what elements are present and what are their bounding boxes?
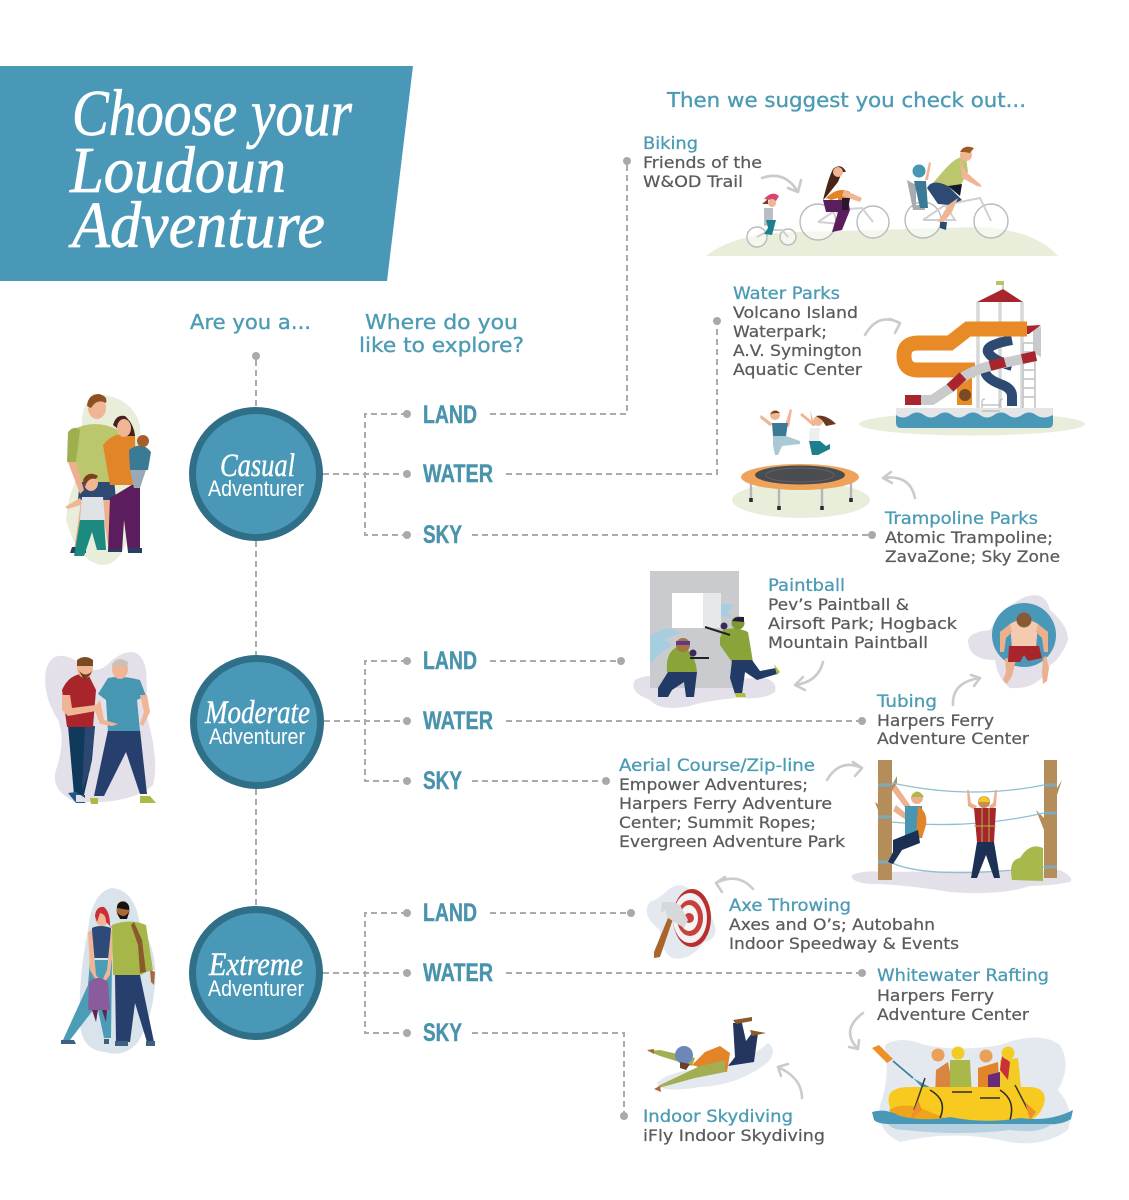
item: axe throwing: Axes and O’s; Autobahn (729, 915, 935, 934)
item: water parks: Aquatic Center (733, 360, 862, 379)
item: water parks: Volcano Island (733, 303, 858, 322)
flow connectors: moderate (324, 657, 866, 785)
illustration: hiking couple (61, 888, 155, 1054)
arrow: trampoline (883, 472, 915, 498)
item: tubing: Harpers Ferry (877, 711, 994, 730)
item: paintball: Paintball (768, 576, 845, 595)
badge: extreme adventurer: Adventurer (208, 976, 304, 1001)
item: indoor skydiving: iFly Indoor Skydiving (643, 1126, 825, 1145)
illustration: couple (45, 652, 156, 804)
badge: moderate adventurer (190, 655, 324, 789)
labels: casual land water sky: WATER (423, 460, 493, 488)
item: indoor skydiving: Indoor Skydiving (643, 1107, 793, 1126)
item: aerial course: Center; Summit Ropes; (619, 813, 816, 832)
title banner: Adventure (68, 189, 325, 262)
heading: are you a: Are you a... (190, 310, 311, 334)
illustration: rafting (872, 1038, 1073, 1143)
illustration: cyclists (706, 147, 1058, 256)
item: axe throwing: Axe Throwing (729, 896, 851, 915)
labels: casual land water sky: LAND (423, 401, 477, 429)
item: aerial course (619, 756, 846, 851)
item: paintball (768, 576, 958, 652)
item: trampoline parks: ZavaZone; Sky Zone (885, 547, 1060, 566)
arrow: paintball (795, 662, 823, 690)
illustration: skydiver (647, 1017, 773, 1092)
item: water parks: Water Parks (733, 284, 840, 303)
item: trampoline parks: Atomic Trampoline; (885, 528, 1053, 547)
arrow: water parks (865, 319, 900, 335)
arrow: whitewater rafting (849, 1013, 863, 1049)
labels: extreme land water sky: LAND (423, 899, 477, 927)
arrow: tubing (953, 675, 980, 705)
labels: casual land water sky: SKY (423, 521, 462, 549)
labels: extreme land water sky (423, 899, 493, 1047)
item: axe throwing: Indoor Speedway & Events (729, 934, 959, 953)
arrow: aerial course (827, 762, 862, 780)
item: aerial course: Empower Adventures; (619, 775, 808, 794)
heading: where do you like to explore: Where do you (365, 310, 518, 334)
illustration: ropes course (852, 760, 1071, 893)
arrow: indoor skydiving (778, 1064, 802, 1098)
labels: extreme land water sky: WATER (423, 959, 493, 987)
title banner (0, 66, 413, 281)
illustration: paintball (633, 571, 780, 708)
badge: extreme adventurer: Extreme (208, 947, 303, 983)
title banner: Choose your (72, 77, 352, 150)
badge: casual adventurer (189, 407, 323, 541)
labels: moderate land water sky: LAND (423, 647, 477, 675)
heading: then we suggest: Then we suggest you check out... (666, 88, 1026, 112)
item: water parks: A.V. Symington (733, 341, 862, 360)
item: trampoline parks: Trampoline Parks (884, 509, 1038, 528)
item: tubing: Tubing (876, 692, 937, 711)
item: aerial course: Evergreen Adventure Park (619, 832, 846, 851)
illustration: axe and target (647, 885, 716, 959)
item: water parks (733, 284, 862, 379)
illustration: trampoline (732, 409, 870, 518)
item: biking: W&OD Trail (643, 172, 743, 191)
item: whitewater rafting (877, 966, 1049, 1024)
item: whitewater rafting: Adventure Center (877, 1005, 1029, 1024)
item: water parks: Waterpark; (733, 322, 827, 341)
badge: moderate adventurer: Adventurer (209, 724, 305, 749)
item: biking (643, 134, 762, 191)
item: paintball: Mountain Paintball (768, 633, 928, 652)
item: aerial course: Aerial Course/Zip-line (619, 756, 815, 775)
item: axe throwing (729, 896, 959, 953)
item: whitewater rafting: Harpers Ferry (877, 986, 994, 1005)
badge: casual adventurer: Adventurer (208, 476, 304, 501)
title banner: Loudoun (69, 134, 286, 207)
item: paintball: Pev’s Paintball & (768, 595, 909, 614)
flow connectors: casual (323, 157, 876, 539)
labels: extreme land water sky: SKY (423, 1019, 462, 1047)
item: paintball: Airsoft Park; Hogback (768, 614, 958, 633)
illustration: tubing (968, 595, 1068, 688)
item: biking: Biking (643, 134, 698, 153)
item: trampoline parks (884, 509, 1060, 566)
item: tubing: Adventure Center (877, 729, 1029, 748)
item: indoor skydiving (643, 1107, 825, 1145)
labels: casual land water sky (423, 401, 493, 549)
illustration: family (65, 394, 151, 565)
illustration: water slide (859, 281, 1085, 436)
heading: where do you like to explore: like to explore? (359, 333, 524, 357)
item: aerial course: Harpers Ferry Adventure (619, 794, 832, 813)
arrow: biking (762, 176, 801, 192)
badge: moderate adventurer: Moderate (204, 695, 310, 731)
labels: moderate land water sky: SKY (423, 767, 462, 795)
heading: where do you like to explore (359, 310, 524, 357)
badge: casual adventurer: Casual (220, 448, 295, 484)
badge: extreme adventurer (189, 906, 323, 1040)
item: biking: Friends of the (643, 153, 762, 172)
item: tubing (876, 692, 1029, 748)
central dashed connector (252, 352, 260, 906)
item: whitewater rafting: Whitewater Rafting (877, 966, 1049, 985)
labels: moderate land water sky: WATER (423, 707, 493, 735)
flow connectors: extreme (323, 909, 866, 1120)
arrow: axe throwing (716, 877, 753, 892)
labels: moderate land water sky (423, 647, 493, 795)
